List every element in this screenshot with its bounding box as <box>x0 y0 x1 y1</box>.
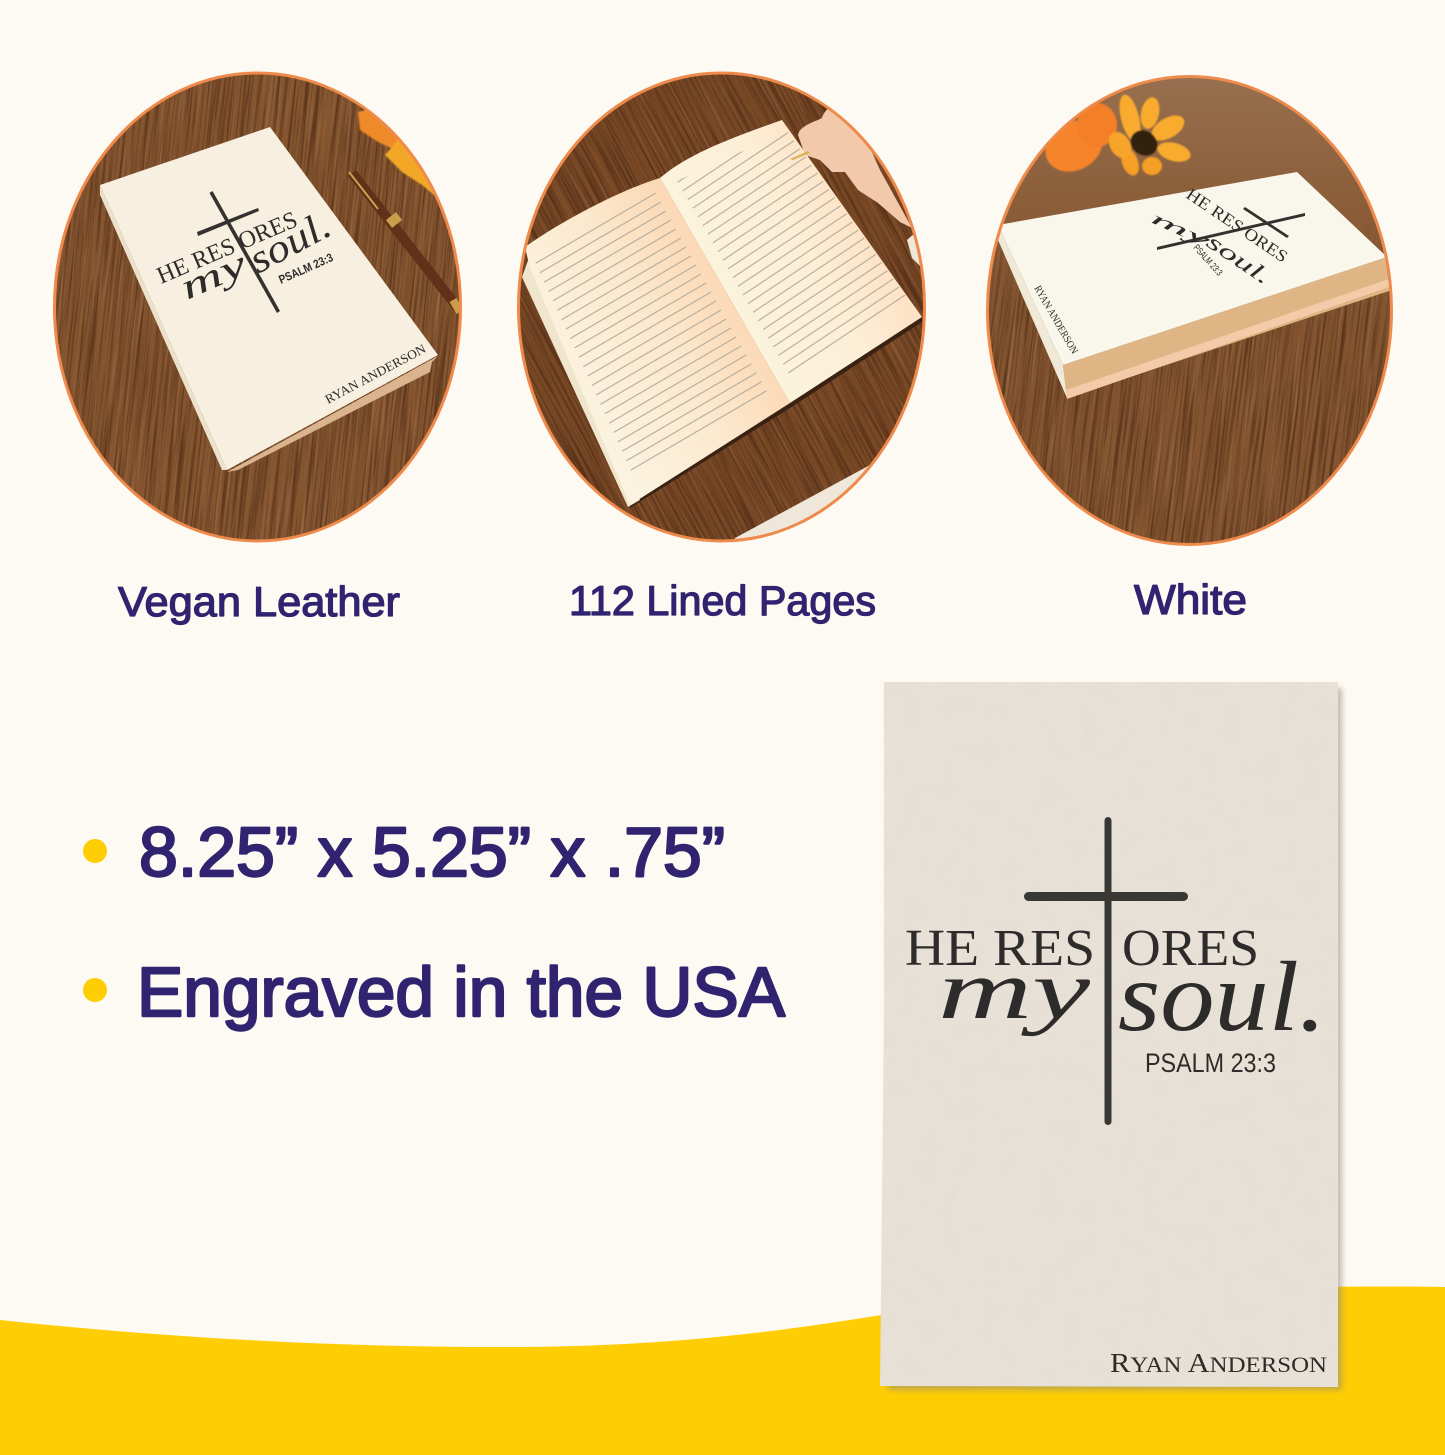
cover engraving <box>1031 185 1305 356</box>
journal cover <box>100 127 438 472</box>
hand with pen <box>790 105 922 268</box>
engraved psalm reference: PSALM 23:3 <box>1145 1048 1276 1078</box>
cover engraving: PSALM 23:3 <box>277 250 335 287</box>
journal <box>998 172 1392 399</box>
engraved soul: soul. <box>1118 941 1326 1052</box>
cross <box>1024 817 1188 1125</box>
bullet: dimensions: 8.25” x 5.25” x .75” <box>139 813 725 891</box>
large journal cover <box>880 682 1342 1390</box>
engraved name: RYAN ANDERSON <box>1110 1348 1327 1378</box>
cover engraving: HE RES ORES <box>153 207 301 290</box>
flower <box>358 108 440 200</box>
large journal cover: ORES <box>1122 920 1259 977</box>
yellow wave footer <box>0 1287 1445 1455</box>
pen <box>349 172 460 312</box>
label: white: White <box>1134 576 1247 623</box>
photo: white journal <box>986 75 1393 546</box>
cover engraving: my <box>1148 207 1213 251</box>
cover engraving: PSALM 23:3 <box>1191 243 1224 278</box>
fabric corner <box>734 466 869 539</box>
label: vegan leather: Vegan Leather <box>118 578 400 625</box>
cover engraving <box>153 191 429 407</box>
cover engraving: soul. <box>241 202 338 282</box>
sunflower <box>1044 94 1192 176</box>
engraved my: my <box>938 944 1091 1037</box>
cover engraving: my <box>174 243 252 307</box>
cover engraving: RYAN ANDERSON <box>1031 284 1080 356</box>
bullet: engraved in the USA: Engraved in the USA <box>137 953 785 1031</box>
photo: vegan leather journal <box>53 72 462 542</box>
label: 112 lined pages: 112 Lined Pages <box>569 577 876 624</box>
cover engraving: HE RES ORES <box>1183 185 1291 266</box>
photo: lined pages <box>517 72 926 542</box>
open journal <box>522 120 922 508</box>
cover engraving: soul. <box>1202 228 1276 289</box>
cover engraving: RYAN ANDERSON <box>322 341 429 407</box>
engraved he restores: HE RES <box>905 920 1095 977</box>
